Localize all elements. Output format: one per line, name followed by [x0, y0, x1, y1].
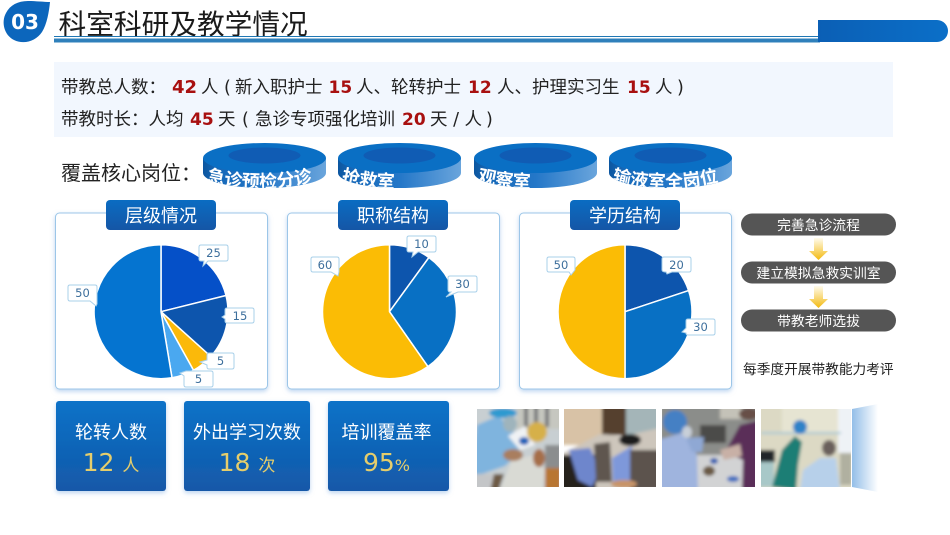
- callout: 30: 30: [693, 320, 708, 334]
- disc: infusion room: 输液室全岗位: [613, 167, 718, 188]
- callout: 5 upper: 5: [217, 354, 224, 368]
- photo: nurse with resuscitation mask: [477, 409, 559, 487]
- text: total teaching staff: 新入职护士: [235, 78, 322, 98]
- heading: education: [570, 200, 680, 230]
- disc: resuscitation room: 抢救室: [342, 167, 394, 188]
- flow step: teacher selection: 带教老师选拔: [777, 314, 860, 330]
- callout: 25: 25: [206, 246, 221, 260]
- disc: triage: 急诊预检分诊: [208, 168, 311, 188]
- text: total teaching staff: 人: [201, 78, 218, 98]
- callout: 20: [662, 257, 691, 274]
- text: total teaching staff: ): [677, 78, 684, 98]
- stat card: training coverage: 95%: [363, 448, 410, 477]
- flow step: teacher selection: [741, 310, 896, 332]
- callout: 5 upper: [200, 353, 234, 369]
- photo: medical staff around patient: [662, 409, 755, 487]
- arrow: step 2 to 3: [809, 286, 828, 308]
- stat card: rotation staff: [56, 401, 166, 491]
- text: total teaching staff: (: [224, 78, 231, 98]
- text: teaching duration: 急诊专项强化培训: [255, 110, 395, 130]
- pie chart: title: [322, 245, 457, 379]
- pie chart: level: [94, 245, 228, 379]
- arrow: step 1 to 2: [809, 238, 828, 260]
- heading: title: [338, 200, 448, 230]
- callout: 30: 30: [455, 277, 470, 291]
- panel: level chart: [56, 200, 268, 389]
- stat card: rotation staff: 轮转人数: [75, 422, 147, 444]
- callout: 5 lower: [180, 371, 213, 387]
- stat card: training coverage: [328, 401, 449, 491]
- text: total teaching staff: [61, 74, 684, 99]
- heading: level: [106, 200, 216, 230]
- callout: 60: [311, 257, 339, 276]
- callout: 5 lower: 5: [195, 372, 202, 386]
- callout: 30: [446, 276, 477, 297]
- text: total teaching staff: 人、轮转护士: [356, 78, 461, 98]
- text: teaching duration: 天 / 人: [430, 110, 482, 130]
- heading: level: 层级情况: [125, 206, 197, 227]
- text: total teaching staff: 人: [655, 78, 672, 98]
- text: quarterly assessment: 每季度开展带教能力考评: [743, 362, 894, 378]
- flow step: emergency process: [741, 214, 896, 236]
- text: total teaching staff: 12: [468, 78, 492, 98]
- callout: 10: [407, 236, 436, 257]
- callout: 60: 60: [318, 258, 332, 272]
- text: total teaching staff: 人、护理实习生: [497, 78, 620, 98]
- disc: resuscitation room: [338, 143, 461, 188]
- stat card: external study: 18 次: [219, 448, 275, 477]
- pie chart: education: [558, 245, 692, 379]
- text: teaching duration: 天: [218, 110, 236, 130]
- heading: core posts: 覆盖核心岗位：: [61, 157, 201, 186]
- text: total teaching staff: 42: [172, 77, 197, 98]
- callout: 50: [547, 257, 575, 275]
- flow step: emergency process: 完善急诊流程: [777, 218, 860, 234]
- text: total teaching staff: 15: [328, 78, 352, 98]
- flow step: simulation room: [741, 262, 896, 284]
- panel: title chart: [288, 200, 500, 389]
- text: total teaching staff: 带教总人数：: [61, 74, 166, 99]
- decorative fade panel: [852, 404, 878, 492]
- header rule and right bar: [54, 20, 948, 42]
- header badge: 03: 03: [11, 10, 39, 34]
- disc: observation room: [474, 143, 597, 188]
- photo: nurse and seated patient: [761, 409, 851, 487]
- callout: 25: [199, 245, 228, 266]
- callout: 15: 15: [233, 309, 247, 323]
- disc: observation room: 观察室: [480, 168, 530, 188]
- text: teaching duration: ): [486, 110, 493, 130]
- callout: 20: 20: [669, 258, 684, 272]
- callout: 30: [682, 319, 715, 335]
- text: total teaching staff: 15: [627, 78, 651, 98]
- stat card: external study: [184, 401, 310, 491]
- stat card: external study: 外出学习次数: [193, 422, 301, 444]
- text: teaching duration: 20: [402, 110, 426, 130]
- callout: 10: 10: [414, 237, 429, 251]
- callout: 50: 50: [75, 286, 90, 300]
- text: teaching duration: (: [242, 110, 249, 130]
- disc: triage: [203, 143, 326, 188]
- photo: patient on bed: [564, 409, 656, 487]
- panel: education chart: [520, 200, 732, 389]
- text: teaching duration: [61, 106, 493, 131]
- stat card: training coverage: 培训覆盖率: [342, 422, 432, 444]
- heading: title: 职称结构: [357, 206, 429, 227]
- disc: infusion room: [609, 143, 732, 188]
- title: 科室科研及教学情况: [58, 8, 308, 41]
- callout: 50: [68, 285, 97, 306]
- text: teaching duration: 45: [190, 110, 214, 130]
- callout: 50: 50: [554, 258, 568, 272]
- stat card: rotation staff: 12 人: [83, 448, 139, 477]
- panel: teaching summary: [54, 62, 893, 137]
- text: teaching duration: 带教时长：人均: [61, 106, 184, 131]
- callout: 15: [222, 308, 254, 323]
- header badge: 03: [4, 1, 50, 42]
- flow step: simulation room: 建立模拟急救实训室: [756, 265, 881, 282]
- heading: education: 学历结构: [589, 206, 661, 227]
